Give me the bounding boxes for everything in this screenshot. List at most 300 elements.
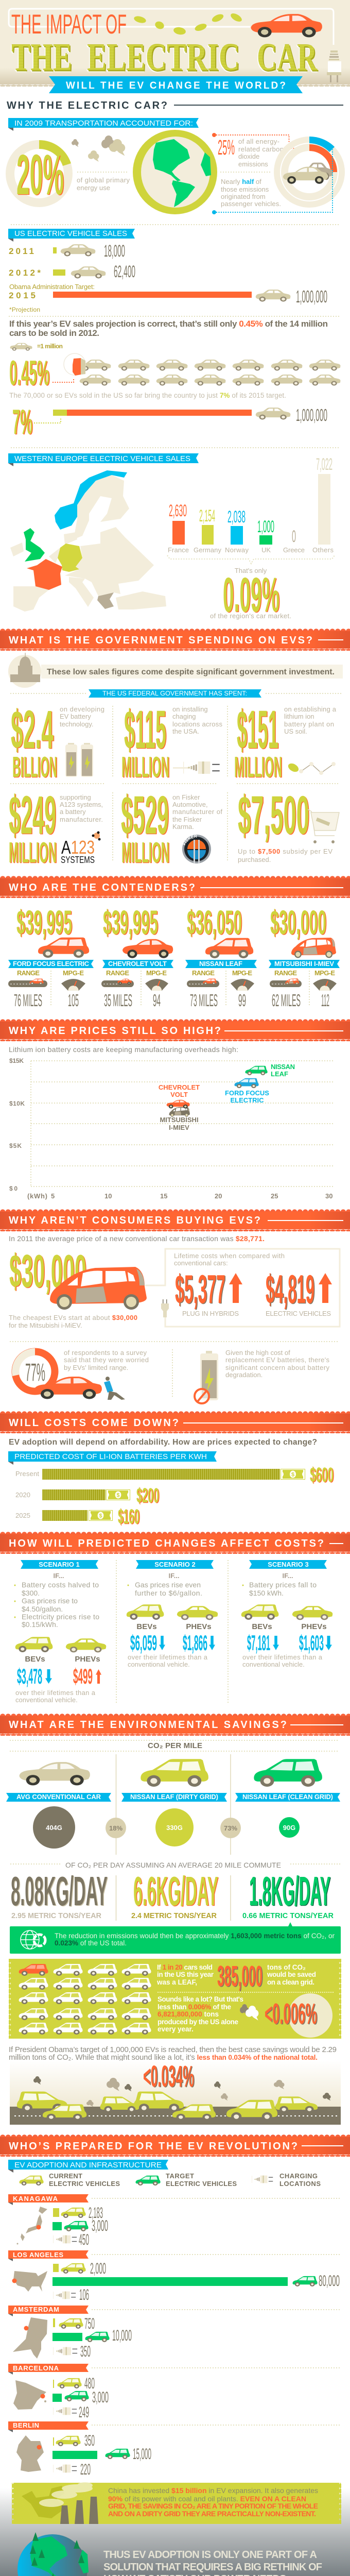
stat: region share [210,567,291,622]
column: leaf dirty grid: NISSAN LEAF (DIRTY GRID) [130,1793,218,1801]
heading: co2 per mile: CO₂ PER MILE [148,1741,202,1750]
bar: greece [283,527,305,554]
text: cheapest EVs [9,1314,137,1329]
text: global primary energy: energy use [77,184,110,192]
point: ford focus: FORD FOCUS [225,1089,269,1097]
row: amsterdam: 10,000 [112,2327,132,2344]
logo: a123 systems [61,832,101,865]
panel: scenario 1: Gas prices rise to [22,1597,78,1605]
tab: us sales: US ELECTRIC VEHICLE SALES [14,229,127,238]
chart: battery cost scatter: 30 [325,1192,332,1200]
icon: battery no sign [195,1351,218,1403]
point: mitsubishi: MITSUBISHI [160,1116,199,1124]
panel: one in twenty: 6,821,800,000 tons [157,2010,219,2018]
card: mitsubishi i-miev: RANGE [274,969,297,977]
stat: 2.4 billion: EV battery [60,713,91,720]
point: chevrolet volt: VOLT [170,1091,188,1098]
stat: region share: That's only [235,567,267,574]
title: the electric car: THE [11,36,72,79]
chart: battery cost scatter: $10K [9,1100,25,1107]
map: japan [16,2207,47,2244]
stat: 2.4 billion: BILLION [12,751,57,784]
text: global primary energy [77,176,130,192]
card: ford focus electric: MPG-E [63,969,84,977]
text: 8.08KG/DAY [11,1868,108,1914]
panel: scenario 1: SCENARIO 1 [39,1561,80,1568]
chart: battery cost scatter: $0 [9,1185,18,1192]
icon: car being pushed [34,1377,125,1400]
logo: fisker [182,835,211,863]
map region: france [27,559,62,590]
legend: city chart key: CHARGING [279,2172,318,2180]
stat: 151 million [234,700,337,784]
panel: one in twenty: on a clean grid. [267,1978,314,1986]
panel: scenario 1: PHEVs [75,1655,100,1664]
tab: adoption and infrastructure [8,2160,168,2173]
text: 6.6KG/DAY [133,1868,218,1914]
map: spain [13,2380,46,2410]
panel: china: GRID, THE SAVINGS IN CO₂ ARE A TINY PORTION OF THE WHOLE [108,2502,318,2510]
bar: norway: Norway [225,546,249,554]
row: amsterdam: AMSTERDAM [13,2306,59,2313]
chart: europe bars: 2,630 [169,501,187,520]
stat: 30000 with car: $30,000 [9,1246,86,1297]
icon: plug [327,50,341,82]
panel: scenario 3: $150 kWh. [249,1589,284,1597]
icon: globe with trees [18,2532,89,2576]
stat: 529 million: MILLION [121,836,169,869]
row: 2015 target: Obama Administration Target: [9,283,95,291]
map region: germany [58,544,82,572]
banner: contenders: WHO ARE THE CONTENDERS? [9,882,195,893]
panel: lifetime costs [145,1249,340,1327]
panel: closing background [0,2488,350,2576]
legend: city chart key [19,2172,321,2188]
tab: western europe [8,453,199,466]
stat: 151 million: US soil. [284,727,307,735]
row: kanagawa: 3,000 [92,2217,108,2234]
chart: 77 percent donut [12,1348,55,1391]
chart: battery cost scatter: $5K [9,1142,22,1149]
row: barcelona: 480 [84,2375,95,2392]
banner: government spending: WHAT IS THE GOVERNMENT SPENDING ON EVS? [9,635,312,646]
panel: scenario 1: $499 [73,1664,93,1688]
badge: 73 percent: 73% [224,1824,237,1832]
stat: 151 million: battery plant on [284,720,334,728]
point: ford focus: ELECTRIC [231,1096,264,1104]
chart: battery cost scatter [9,1057,335,1200]
panel: one in twenty: in the US this year [157,1971,214,1978]
stat: 8.08 kg per day [11,1868,108,1920]
illustration: traffic scene [10,2060,341,2125]
logo: a123 systems: A123 [61,837,95,858]
stat: 2.4 billion [11,700,104,784]
tab: predicted cost: PREDICTED COST OF LI-ION BATTERIES PER KWH [14,1452,207,1461]
column: conventional car [6,1762,111,1849]
chart: 7 percent bar [53,405,327,425]
text: nearly half: passenger vehicles. [221,200,281,208]
bar: greece: 0 [292,527,296,546]
map region: uk [24,528,45,562]
icon: capitol [10,653,40,682]
text: 20% [16,143,64,207]
map: usa [12,2271,47,2292]
text: obama target savings: If President Obama’s target of 1,000,000 EVs is reached, then the best case savings would be 2.29 [9,2045,337,2054]
panel: one in twenty [9,1959,341,2039]
panel: scenario 3: conventional vehicle. [242,1660,305,1668]
card: ford focus electric: RANGE [17,969,40,977]
card: ford focus electric: $39,995 [16,903,72,941]
row: berlin: 15,000 [133,2446,151,2463]
power cord [9,9,334,45]
chart: battery cost scatter: 25 [271,1192,278,1200]
bar: others [312,455,334,554]
column: leaf clean grid: 90G [283,1824,295,1832]
text: limited range: by EVs' limited range. [64,1364,128,1371]
dividers with percent reductions [116,1754,231,1921]
title: the electric car: CAR [257,36,318,79]
text: closing statement [103,2549,322,2576]
column: leaf clean grid: NISSAN LEAF (CLEAN GRID) [242,1793,333,1801]
panel: one in twenty: was a LEAF, [156,1978,197,1986]
text: global primary energy: of global primary [77,176,130,184]
row: los angeles [8,2250,340,2303]
callout: half connector [212,149,332,214]
panel: scenario 1: Battery costs halved to [22,1581,99,1589]
stat: 529 million: Automotive, [172,801,208,808]
row: berlin [8,2421,340,2478]
map region: greece [97,592,114,609]
stat: plug in hybrids: $5,377 [175,1266,225,1312]
bar: present: Present [15,1470,39,1478]
panel: lifetime costs: conventional cars: [174,1259,228,1267]
stat: 2.4 billion: technology. [60,720,94,728]
chart: battery cost scatter: 15 [160,1192,167,1200]
ribbon: federal spend [10,689,341,698]
text: energy related: dioxide [238,152,259,160]
card: chevrolet volt [101,903,173,1010]
icon: clouds [72,135,125,162]
pictogram: 14 million cars [80,360,340,385]
stat: 115 million: the USA. [172,727,199,735]
banner: who's prepared: WHO’S PREPARED FOR THE EV REVOLUTION? [9,2141,297,2152]
text: 0.45% [9,353,49,393]
card: mitsubishi i-miev: 112 [321,991,329,1010]
text: cheapest EVs: for the Mitsubishi i-MiEV. [9,1321,82,1329]
panel: scenario 3: SCENARIO 3 [268,1561,309,1568]
stat: 249 million: A123 systems, [60,801,103,808]
text: affordability: EV adoption will depend on affordability. How are prices expected to change? [9,1438,317,1447]
panel: scenario 2: $1,866 [183,1631,207,1655]
panel: scenario 2: Gas prices rise even [135,1581,201,1589]
banner: subtitle ribbon: WILL THE EV CHANGE THE WORLD? [66,80,286,91]
chart: battery cost scatter: 20 [215,1192,222,1200]
badge: 18 percent: 18% [109,1824,122,1832]
row: 2015 target [9,283,327,306]
point: chevrolet volt [159,1083,200,1108]
banner: environmental savings: WHAT ARE THE ENVIRONMENTAL SAVINGS? [9,1719,287,1731]
logo: fisker: FISKER [183,835,197,845]
point: nissan leaf: NISSAN [271,1063,295,1071]
stat: 529 million [121,785,222,869]
stat: 249 million: a battery [60,808,86,816]
row: los angeles: 106 [79,2286,89,2303]
stat: 249 million [9,785,103,869]
bar: present [15,1464,334,1486]
panel: scenario 1 [14,1560,106,1704]
card: ford focus electric: FORD FOCUS ELECTRIC [13,960,90,968]
text: obama target savings [9,2045,337,2062]
stat: 529 million: the Fisker [172,816,202,823]
stat: 6.6 kg per day: 2.4 METRIC TONS/YEAR [131,1912,217,1920]
card: chevrolet volt: 35 MILES [104,991,132,1010]
point: chevrolet volt: CHEVROLET [159,1083,200,1091]
heading: co2 per day: OF CO₂ PER DAY ASSUMING AN AVERAGE 20 MILE COMMUTE [65,1861,281,1869]
column: conventional car: 404G [46,1824,62,1832]
bar: others: Others [312,546,334,554]
banner: will costs come down [0,1411,350,1433]
bar: greece: Greece [283,546,305,554]
text: battery degradation [225,1349,329,1379]
row: 2015 target: 2015 [9,291,36,300]
text: limited range: said that they were worried [64,1356,149,1364]
panel: scenario 1: $4.50/gallon. [22,1605,63,1613]
tab: adoption and infrastructure: EV ADOPTION AND INFRASTRUCTURE [14,2161,162,2170]
bar: france: France [168,546,189,554]
row: kanagawa [8,2194,340,2248]
bar: norway: 2,038 [227,507,246,526]
chart: battery cost bars: $200 [136,1484,159,1507]
text: obama target savings: million tons of CO₂. While that might sound like a lot, it’s less than 0.034% of the national total. [9,2053,318,2062]
chart: us sales bars: 62,400 [114,262,135,281]
stat: 249 million: manufacturer. [60,816,103,823]
stat: plug in hybrids [175,1266,242,1317]
row: berlin: BERLIN [13,2421,39,2429]
panel: scenario 2: IF... [169,1572,179,1580]
text: energy related: emissions [238,160,268,168]
row: barcelona [8,2364,340,2421]
card: chevrolet volt: $39,995 [103,903,158,941]
panel: scenario 3: PHEVs [301,1622,327,1631]
text: sales projection [9,319,328,338]
row: 2011 [9,242,125,260]
row: amsterdam: 350 [80,2343,91,2360]
panel: scenario 2: conventional vehicle. [128,1660,190,1668]
chart: europe bars: 1,000 [257,517,274,536]
stat: plug in hybrids: PLUG IN HYBRIDS [182,1310,239,1317]
icon: batteries [65,743,93,777]
panel: scenario 3: $7,181 [247,1631,270,1655]
map region: norway [55,470,127,530]
stat: 115 million: locations across [172,720,222,728]
chart: 20 percent donut [10,140,71,207]
chart: battery cost scatter: $15K [9,1057,24,1064]
badge: 73 percent [220,1818,241,1838]
column: conventional car: AVG CONVENTIONAL CAR [16,1793,101,1801]
icon: vertical plug [161,1299,169,1317]
panel: one in twenty: less than 0.006% of the [157,2003,231,2011]
panel: emissions reduction [10,1922,341,1954]
icon: globe recycle [21,1930,45,1949]
point: nissan leaf: LEAF [271,1070,288,1078]
card: mitsubishi i-miev: 62 MILES [272,991,301,1010]
title: the electric car [11,36,318,79]
panel: scenario 1: BEVs [25,1655,45,1664]
stat: 249 million: supporting [60,793,91,801]
bar: 2020: 2020 [15,1491,30,1499]
stat: 115 million: chaging [172,713,196,720]
chart: emissions rings [277,137,342,205]
stat: 1.8 kg per day: 0.66 METRIC TONS/YEAR [242,1912,334,1920]
row: los angeles: 2,000 [90,2260,106,2277]
point: mitsubishi [160,1107,199,1131]
banner: prices [0,1019,350,1041]
banner: predicted changes [0,1532,350,1554]
logo: a123 systems: SYSTEMS [61,855,95,865]
stat: 7500 subsidy: purchased. [238,856,271,863]
panel: scenario 2 [127,1560,218,1668]
text: limited range: of respondents to a survey [64,1349,147,1357]
stat: 529 million: $529 [121,785,169,845]
legend: city chart key: TARGET [166,2172,194,2180]
bar: france [168,501,189,554]
chart: battery cost bars: $160 [118,1505,139,1528]
card: mitsubishi i-miev [269,903,340,1010]
banner: contenders [0,876,350,898]
text: seven percent target: The 70,000 or so EVs sold in the US so far bring the country to just 7% of its 2015 target. [9,392,286,399]
text: battery degradation: replacement EV batteries, there's [225,1356,329,1364]
panel: scenario 1: $3,478 [17,1664,42,1688]
panel: header background [0,0,350,87]
chart: battery cost bars [15,1464,334,1528]
stat: 115 million: on installing [172,705,208,713]
card: mitsubishi i-miev: MPG-E [314,969,335,977]
point: ford focus [225,1078,269,1104]
row: barcelona: 249 [79,2404,89,2421]
panel: china [12,2482,341,2524]
ribbon: federal spend: THE US FEDERAL GOVERNMENT HAS SPENT: [102,690,247,697]
row: berlin: 220 [80,2461,91,2478]
title: the impact of: THE IMPACT OF [11,9,127,40]
row: kanagawa: 450 [79,2231,89,2248]
badge: 18 percent [106,1818,126,1838]
text: nearly half [221,178,281,208]
card: nissan leaf: 73 MILES [190,991,218,1010]
card: nissan leaf [185,903,257,1010]
panel: scenario 2: BEVs [136,1622,157,1631]
column: leaf dirty grid [121,1759,227,1846]
card: mitsubishi i-miev: MITSUBISHI I-MIEV [274,960,334,968]
panel: scenario 3 [241,1560,332,1668]
legend: city chart key: ELECTRIC VEHICLES [166,2180,237,2188]
stat: 249 million: MILLION [9,836,57,869]
panel: china: 90% of its power with coal and oil plants. EVEN ON A CLEAN [108,2495,306,2503]
panel: scenario 1: conventional vehicle. [15,1696,78,1704]
text: cheapest EVs: The cheapest EVs start at about $30,000 [9,1314,137,1321]
icon: globe [133,130,217,214]
chart: europe bars [168,455,334,554]
text: energy related: of all energy- [238,138,279,145]
icon: smokestacks [39,2482,98,2524]
chart: battery cost scatter: 10 [104,1192,112,1200]
card: chevrolet volt: 94 [153,991,161,1010]
text: low sales: These low sales figures come despite significant government investment. [47,668,335,676]
card: ford focus electric [8,903,94,1010]
text: nearly half: originated from [221,193,266,200]
row: amsterdam: 750 [84,2315,95,2332]
row: amsterdam [8,2306,340,2360]
text: 7% [12,402,32,442]
panel: one in twenty: would be saved [267,1971,316,1978]
panel: scenario 2: SCENARIO 2 [154,1561,196,1568]
banner: prices: WHY ARE PRICES STILL SO HIGH? [9,1025,221,1037]
bar: germany [194,506,221,554]
bar: uk: UK [261,546,271,554]
stat: 151 million: on establishing a [284,705,337,713]
card: nissan leaf: RANGE [192,969,215,977]
row: 2012: 2012* [9,268,41,278]
stat: 30000 with car [9,1246,147,1310]
heading: why the electric car: WHY THE ELECTRIC CAR? [7,100,167,111]
footnote: projection: *Projection [9,306,40,313]
card: nissan leaf: $36,050 [187,903,242,941]
panel: scenario 2: $6,059 [130,1631,157,1655]
column: leaf dirty grid: 330G [166,1824,183,1832]
panel: scenario 2: further to $6/gallon. [135,1589,202,1597]
map: europe [10,470,166,612]
bar: germany: Germany [194,546,221,554]
text: energy related [238,138,284,168]
stat: 529 million: Karma. [172,823,194,831]
panel: scenario 1: Electricity prices rise to [22,1613,99,1621]
card: nissan leaf: 99 [238,991,246,1010]
stat: 2.4 billion: $2.4 [11,700,54,760]
text: closing statement: THUS EV ADOPTION IS ONLY ONE PART OF A [103,2549,317,2561]
panel: scenario 1: over their lifetimes than a [15,1689,96,1697]
pictogram: twenty cars [19,1964,151,2035]
title: the electric car: ELECTRIC [87,36,240,79]
row: 2011: 2011 [9,246,34,256]
row: berlin: 350 [84,2432,95,2449]
chart: 77 percent donut: 77% [25,1359,45,1386]
text: battery degradation: degradation. [225,1371,262,1379]
chart: us sales bars: 18,000 [104,242,125,260]
legend: car equals one million [10,343,63,351]
illustration: traffic scene: <0.034% [143,2060,194,2093]
panel: lifetime costs: Lifetime costs when compared with [174,1252,285,1260]
panel: emissions reduction: The reduction in emissions would then be approximately 1,603,000 metric tons of CO₂, or [55,1932,335,1940]
panel: scenario 2: PHEVs [186,1622,212,1631]
bar: 2025 [15,1505,139,1528]
chart: battery cost scatter: (kWh) [27,1192,47,1200]
stat: 8.08 kg per day: 2.95 METRIC TONS/YEAR [11,1912,102,1920]
legend: city chart key: ELECTRIC VEHICLES [49,2180,120,2188]
panel: capitol statement [8,653,343,688]
panel: scenario 1: $0.15/kWh. [22,1620,58,1629]
banner: environmental savings [0,1714,350,1736]
panel: scenario 3: IF... [283,1572,293,1580]
column: leaf clean grid [235,1759,340,1838]
stat: 2.4 billion: on developing [60,705,104,713]
text: nearly half: Nearly half of [221,178,261,185]
banner: predicted changes: HOW WILL PREDICTED CHANGES AFFECT COSTS? [9,1538,324,1549]
text: battery degradation: significant concern about battery [225,1364,329,1371]
bar: uk [257,517,274,554]
card: chevrolet volt: MPG-E [146,969,167,977]
banner: consumers [0,1209,350,1231]
row: kanagawa: KANAGAWA [13,2195,58,2202]
text: sales projection: cars to be sold in 2012. [9,328,99,338]
